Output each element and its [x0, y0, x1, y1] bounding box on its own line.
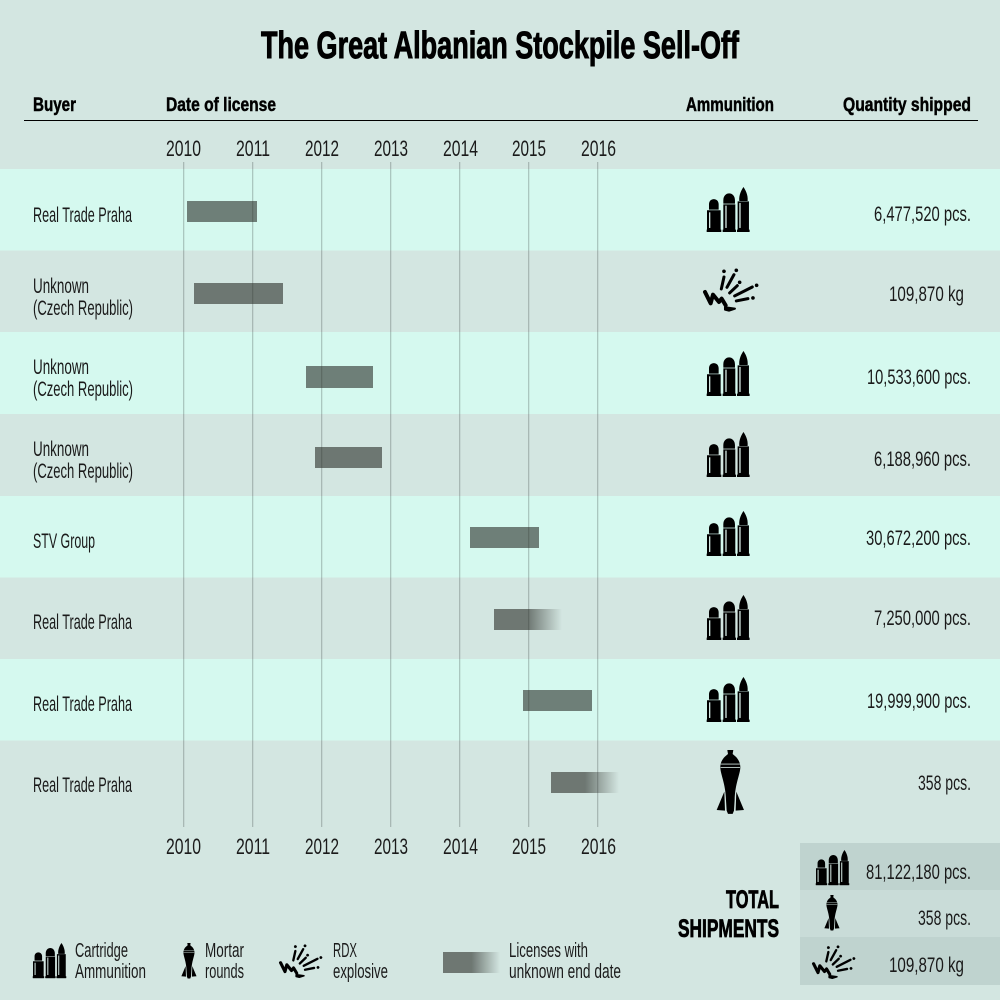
legend label: mortar: Mortar	[205, 940, 244, 962]
license bars	[187, 201, 619, 793]
legend label: licenses	[509, 940, 621, 983]
total values	[866, 861, 971, 977]
bottom year axis: 2014	[443, 834, 478, 859]
column headers: Quantity shipped	[843, 95, 971, 116]
grid lines	[183, 162, 598, 827]
top year axis: 2016	[581, 136, 616, 161]
bottom year axis: 2016	[581, 834, 616, 859]
icon: cartridge legend	[33, 943, 66, 978]
legend label: cartridge: Ammunition	[75, 961, 146, 983]
buyer names: (Czech Republic)	[33, 460, 133, 483]
top year axis: 2011	[236, 136, 270, 161]
total values: 109,870 kg	[889, 954, 964, 977]
legend	[33, 940, 621, 983]
buyer names: (Czech Republic)	[33, 297, 133, 320]
total shipments label: SHIPMENTS	[678, 915, 779, 943]
buyer names: Real Trade Praha	[33, 774, 132, 797]
totals panel	[800, 843, 1000, 985]
bottom year axis: 2015	[512, 834, 546, 859]
total values: 358 pcs.	[918, 907, 971, 930]
legend label: licenses: unknown end date	[509, 961, 621, 983]
icon: blast total	[814, 946, 855, 978]
buyer names: Real Trade Praha	[33, 693, 132, 716]
icon: blast legend	[281, 945, 322, 977]
top year axis: 2012	[305, 136, 339, 161]
top year axis: 2015	[512, 136, 546, 161]
buyer names: Unknown	[33, 356, 89, 379]
top year axis: 2013	[374, 136, 408, 161]
bottom year axis: 2013	[374, 834, 408, 859]
total shipments label	[678, 886, 779, 943]
quantities	[866, 203, 971, 795]
bottom year axis: 2012	[305, 834, 339, 859]
legend label: licenses: Licenses with	[509, 940, 588, 962]
buyer names: Real Trade Praha	[33, 611, 132, 634]
legend label: mortar	[205, 940, 244, 983]
top year axis: 2010	[166, 136, 201, 161]
buyer names: Unknown	[33, 438, 89, 461]
buyer names: (Czech Republic)	[33, 378, 133, 401]
ammunition icons	[705, 187, 758, 814]
bottom year axis: 2011	[236, 834, 270, 859]
column headers: Date of license	[166, 95, 276, 116]
quantities: 109,870 kg	[889, 283, 964, 306]
legend label: RDX: explosive	[333, 961, 388, 983]
legend label: RDX	[333, 940, 388, 983]
table rows	[0, 169, 1000, 740]
legend bar: unknown end date	[443, 952, 500, 973]
column headers	[24, 95, 978, 121]
buyer names: STV Group	[33, 530, 95, 553]
icon: cartridge total	[816, 850, 849, 885]
top year axis	[166, 136, 616, 161]
legend label: RDX: RDX	[333, 940, 357, 962]
legend label: cartridge	[75, 940, 146, 983]
bottom year axis	[166, 834, 616, 859]
icon: mortar total	[824, 895, 840, 931]
total shipments label: TOTAL	[726, 886, 779, 914]
buyer names: Unknown	[33, 275, 89, 298]
top year axis: 2014	[443, 136, 478, 161]
column headers: Buyer	[33, 95, 76, 116]
legend label: cartridge: Cartridge	[75, 940, 128, 962]
column headers: Ammunition	[686, 95, 774, 116]
buyer names	[33, 204, 133, 797]
buyer names: Real Trade Praha	[33, 204, 132, 227]
title: The Great Albanian Stockpile Sell-Off	[261, 25, 739, 67]
icon: mortar legend	[181, 943, 197, 979]
legend label: mortar: rounds	[205, 961, 244, 983]
quantities: 358 pcs.	[918, 772, 971, 795]
bottom year axis: 2010	[166, 834, 201, 859]
